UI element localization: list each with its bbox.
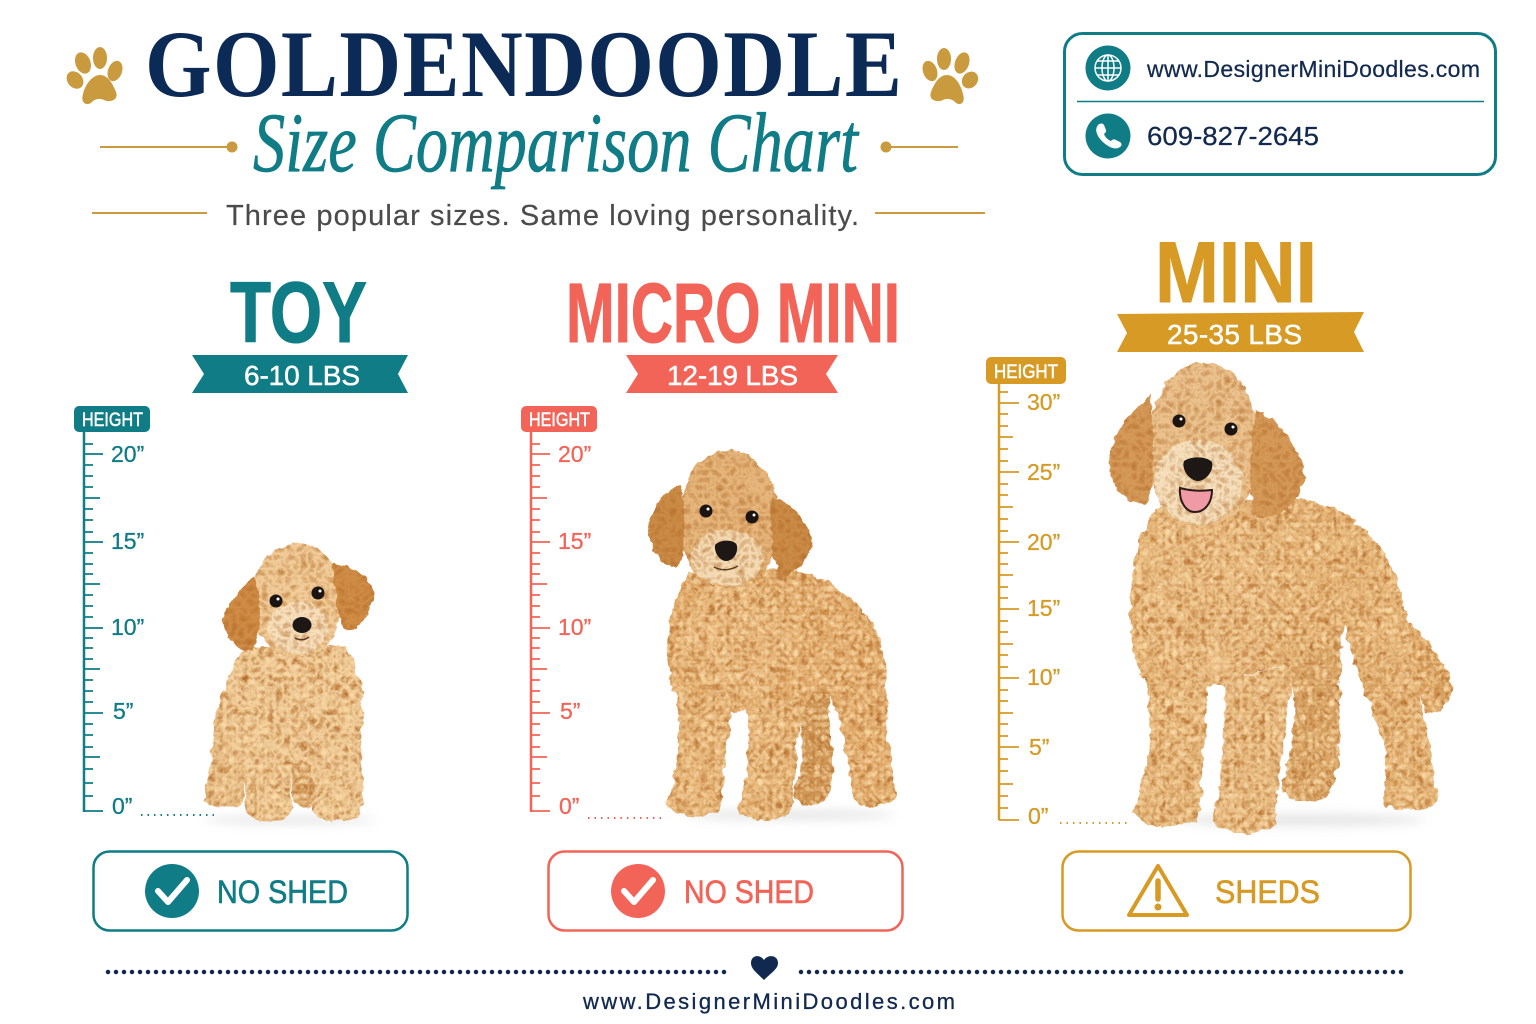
subtitle: Size Comparison Chart: Size Comparison Chart (253, 96, 860, 190)
illustration: mini goldendoodle (1109, 362, 1452, 834)
tagline: Three popular sizes. Same loving personality. (226, 200, 859, 232)
panel: toy (74, 265, 408, 930)
dog face (700, 504, 758, 570)
height ruler: 15” (558, 528, 591, 554)
icon: globe (1086, 46, 1130, 90)
ribbon: 6-10 lbs: 6-10 LBS (244, 360, 360, 391)
heading: MICRO MINI: MICRO MINI (566, 266, 900, 360)
badge: no shed: NO SHED (217, 874, 348, 910)
height ruler: 5” (560, 698, 580, 724)
dog head (1109, 362, 1304, 528)
height ruler: 0” (1028, 803, 1048, 829)
ribbon: 12-19 lbs: 12-19 LBS (667, 360, 798, 391)
header: title block (63, 11, 985, 232)
icon: right paw (920, 48, 982, 104)
dog face (270, 586, 324, 640)
contact box (1064, 34, 1496, 174)
height ruler: 15” (111, 528, 144, 554)
height ruler: 5” (1029, 734, 1049, 760)
decorative line left with dot (92, 142, 985, 213)
height ruler: 25” (1027, 459, 1060, 485)
website text: www.DesignerMiniDoodles.com (1146, 56, 1480, 82)
height ruler: 5” (113, 698, 133, 724)
panel: micro mini (521, 266, 902, 930)
height ruler: HEIGHT (82, 410, 143, 431)
height ruler: 20” (558, 441, 591, 467)
heading: TOY: TOY (230, 265, 367, 361)
panel: mini (986, 225, 1452, 930)
badge: sheds (1062, 852, 1410, 930)
height ruler: 0” (112, 793, 132, 819)
height ruler: 10” (111, 614, 144, 640)
badge: no shed (548, 852, 902, 930)
dog face (1172, 414, 1238, 512)
badge: no shed (94, 852, 408, 930)
title: GOLDENDOODLE: GOLDENDOODLE (145, 11, 902, 117)
height ruler: 0” (559, 793, 579, 819)
ribbon: 6-10 lbs (192, 355, 408, 393)
height ruler: HEIGHT (529, 410, 590, 431)
footer (108, 956, 1402, 1014)
height ruler: HEIGHT (994, 362, 1058, 383)
ribbon: 12-19 lbs (626, 355, 838, 393)
height ruler: 15” (1027, 595, 1060, 621)
phone number: 609-827-2645 (1147, 121, 1319, 151)
badge: no shed: NO SHED (684, 874, 814, 910)
illustration: toy goldendoodle puppy (204, 543, 375, 824)
height ruler (74, 406, 216, 819)
ribbon: 25-35 lbs (1117, 312, 1364, 352)
dog head (223, 543, 375, 657)
height ruler: 20” (111, 441, 144, 467)
height ruler: 20” (1027, 529, 1060, 555)
height ruler: 30” (1027, 389, 1060, 415)
height ruler: 10” (558, 614, 591, 640)
dog head (648, 450, 812, 587)
badge: sheds: SHEDS (1215, 874, 1320, 910)
illustration: micro mini goldendoodle (648, 450, 897, 821)
height ruler (521, 406, 665, 819)
footer url: www.DesignerMiniDoodles.com (582, 989, 955, 1014)
ribbon: 25-35 lbs: 25-35 LBS (1167, 319, 1302, 350)
icon: left paw (63, 47, 125, 104)
height ruler (986, 357, 1131, 829)
heading: MINI: MINI (1155, 225, 1317, 321)
icon: heart (751, 956, 778, 980)
icon: phone (1086, 114, 1130, 158)
height ruler: 10” (1027, 664, 1060, 690)
